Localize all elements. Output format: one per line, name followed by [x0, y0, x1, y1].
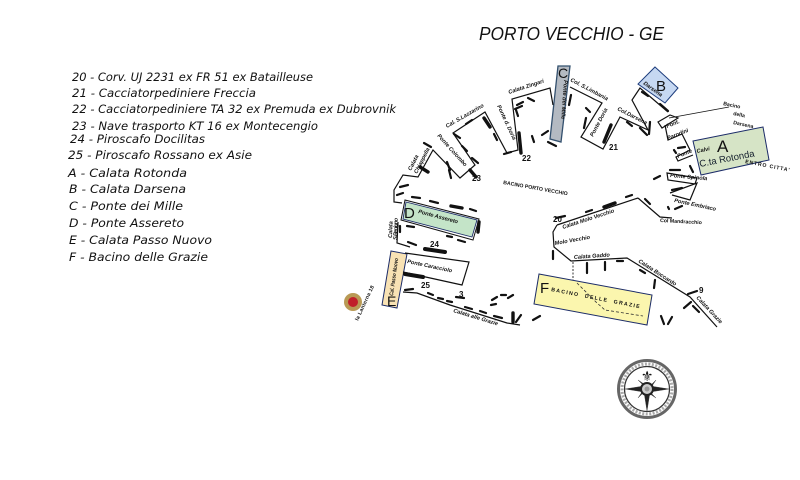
legend: ships and quays: 25 - Piroscafo Rossano ex Asie	[68, 148, 252, 162]
quay and pier names: Calata alle Grazie	[452, 308, 498, 327]
legend: ships and quays: F - Bacino delle Grazie	[69, 250, 208, 264]
quay and pier names: Calata	[388, 221, 395, 238]
title: PORTO VECCHIO - GE	[479, 24, 665, 44]
icon: compass rose	[618, 360, 676, 418]
panel: D Ponte Assereto	[401, 200, 479, 240]
panel: C Ponte dei Mille: Ponte dei Mille	[559, 80, 568, 119]
quay outlines	[394, 87, 729, 327]
panel: A Calata Rotonda: A	[717, 137, 729, 156]
legend: ships and quays: 22 - Cacciatorpediniere TA 32 ex Premuda ex Dubrovnik	[72, 102, 397, 116]
quay and pier names: BACINO PORTO VECCHIO	[503, 180, 568, 197]
label: centro citta: ENTRO CITTA'	[745, 159, 790, 174]
quay and pier names: Ponte Colombo	[436, 133, 468, 168]
quay and pier names: Col. S.Limbania	[569, 77, 609, 102]
panel: C Ponte dei Mille: C	[558, 65, 568, 81]
ship numbers: 22	[522, 154, 531, 163]
quay and pier names: della	[733, 111, 746, 119]
ships moored	[397, 92, 699, 324]
panel: D Ponte Assereto: Ponte Assereto	[417, 209, 459, 226]
quay and pier names: Cal. S.Lazzarino	[445, 103, 486, 130]
panel: C Ponte dei Mille	[550, 65, 570, 142]
panel: B Calata Darsena: Darsena	[642, 81, 663, 99]
quay and pier names: Ponte Doria	[589, 107, 610, 138]
ship numbers: 23	[472, 174, 481, 183]
quay and pier names: Ponte d. Doria	[495, 104, 517, 141]
quay and pier names: Calata Molo Vecchio	[562, 208, 616, 231]
ship numbers: 9	[699, 286, 704, 295]
quay and pier names: Parodini	[667, 128, 690, 142]
quay and pier names: Calata	[407, 154, 420, 172]
legend: ships and quays: 24 - Piroscafo Docilitas	[70, 132, 205, 146]
harbour map	[354, 65, 790, 327]
ship numbers	[421, 143, 704, 299]
legend: ships and quays: D - Ponte Assereto	[69, 216, 184, 230]
icon: compass rose: ⚜	[641, 369, 653, 385]
quay and pier names: Ponte Caracciolo	[407, 259, 453, 275]
quay and pier names: Calata Grazie	[695, 295, 723, 325]
quay and pier names: Calata Gaddo	[574, 252, 611, 261]
legend: ships and quays: A - Calata Rotonda	[67, 166, 187, 180]
legend: ships and quays: 21 - Cacciatorpediniere Freccia	[72, 86, 256, 100]
legend: ships and quays: 23 - Nave trasporto KT 16 ex Montecengio	[72, 119, 318, 133]
ship numbers: 24	[430, 240, 439, 249]
panel: E Calata Passo Nuovo: Cal. Passo Nuovo	[389, 257, 400, 296]
panel: A Calata Rotonda	[693, 127, 769, 175]
panel: A Calata Rotonda: C.ta Rotonda	[698, 148, 756, 170]
legend: ships and quays: C - Ponte dei Mille	[69, 199, 183, 213]
panel: E Calata Passo Nuovo	[382, 251, 407, 309]
panel: E Calata Passo Nuovo: E	[387, 293, 396, 309]
panel: B Calata Darsena	[638, 67, 678, 103]
quay and pier names: Molo Vecchio	[554, 235, 591, 247]
quay and pier names: S.Benigno	[393, 217, 400, 240]
panel: A Calata Rotonda: Calvi	[696, 146, 711, 155]
panel: F Bacino delle Grazie: BACINO DELLE GRAZIE	[551, 287, 641, 310]
legend: ships and quays: B - Calata Darsena	[69, 182, 186, 196]
quay and pier names: Ponte	[677, 148, 693, 160]
quay and pier names	[354, 77, 754, 327]
panel: B Calata Darsena: B	[656, 78, 666, 95]
quay and pier names: Ponte Embriaco	[674, 198, 717, 213]
quay and pier names: Col Mandracchio	[660, 218, 702, 226]
ship numbers: 3	[459, 290, 464, 299]
quay and pier names: Bacino	[723, 101, 741, 111]
panel: F Bacino delle Grazie: F	[540, 280, 549, 297]
ship numbers: 25	[421, 281, 430, 290]
ship numbers: 20	[553, 215, 562, 224]
quay and pier names: Calata Zingari	[508, 79, 545, 96]
panel: F Bacino delle Grazie	[534, 262, 652, 325]
quay and pier names: Pont.	[666, 119, 681, 130]
quay and pier names: Calata Boccardo	[637, 259, 678, 288]
legend: ships and quays: 20 - Corv. UJ 2231 ex FR 51 ex Batailleuse	[72, 70, 313, 84]
quay and pier names: Chiappella	[413, 147, 432, 175]
icon: red location marker	[344, 293, 362, 311]
panel: D Ponte Assereto: D	[404, 205, 415, 222]
quay and pier names: Col.Darsena	[616, 106, 648, 127]
quay and pier names: Ponte Spinola	[670, 173, 708, 182]
ship numbers: 21	[609, 143, 618, 152]
legend: ships and quays	[67, 70, 397, 264]
quay and pier names: Darsena	[733, 120, 754, 130]
legend: ships and quays: E - Calata Passo Nuovo	[69, 233, 212, 247]
quay and pier names: la Lanterna 18	[354, 285, 376, 322]
